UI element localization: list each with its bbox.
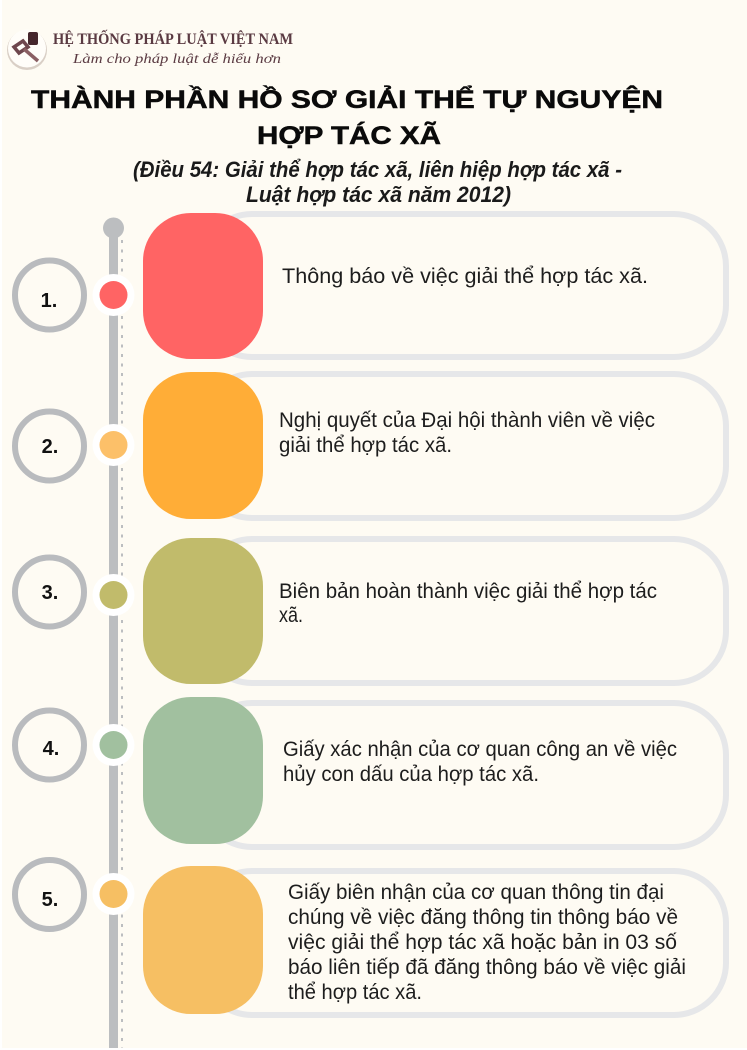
number ring 4 — [15, 710, 84, 780]
text 5 — [288, 881, 686, 1004]
logo — [7, 30, 47, 70]
organisation name: HỆ THỐNG PHÁP LUẬT VIỆT NAM — [53, 28, 293, 48]
text 5: báo liên tiếp đã đăng thông báo về việc giải — [288, 956, 686, 979]
text panel 5 — [200, 871, 726, 1015]
colour block 1 — [143, 213, 263, 359]
text 2: Nghị quyết của Đại hội thành viên về việc — [279, 409, 655, 432]
text 4 — [283, 738, 677, 786]
text 5: thể hợp tác xã. — [288, 981, 422, 1004]
step 4 — [15, 697, 726, 847]
colour block 2 — [143, 372, 263, 519]
timeline dot 3 — [92, 574, 134, 616]
text 5: Giấy biên nhận của cơ quan thông tin đại — [288, 881, 664, 904]
subtitle: (Điều 54: Giải thể hợp tác xã, liên hiệp hợp tác xã - — [133, 157, 622, 182]
step 5 — [15, 860, 726, 1015]
timeline dot 2 — [92, 424, 134, 466]
number ring 4: 4. — [43, 738, 59, 760]
title: HỢP TÁC XÃ — [257, 120, 441, 150]
colour block 4 — [143, 697, 263, 844]
number ring 2 — [15, 412, 84, 480]
number ring 5 — [15, 860, 84, 929]
text 3: Biên bản hoàn thành việc giải thể hợp tác — [279, 580, 657, 603]
step 1 — [15, 213, 726, 359]
number ring 5: 5. — [42, 889, 58, 911]
subtitle: Luật hợp tác xã năm 2012) — [246, 182, 511, 207]
tagline: Làm cho pháp luật dễ hiểu hơn — [72, 52, 281, 67]
number ring 1 — [15, 260, 84, 330]
step 2 — [15, 372, 726, 519]
text 4: hủy con dấu của hợp tác xã. — [283, 763, 539, 786]
text 1: Thông báo về việc giải thể hợp tác xã. — [282, 265, 648, 288]
text panel 2 — [200, 374, 726, 518]
title — [31, 84, 663, 150]
number ring 3 — [15, 558, 84, 626]
colour block 5 — [143, 866, 263, 1014]
text 5: chúng về việc đăng thông tin thông báo về — [288, 906, 678, 929]
timeline — [103, 218, 124, 1048]
text 2: giải thể hợp tác xã. — [279, 434, 452, 457]
subtitle — [133, 157, 622, 207]
text 2 — [279, 409, 655, 457]
number ring 3: 3. — [42, 582, 58, 604]
text 4: Giấy xác nhận của cơ quan công an về việc — [283, 738, 677, 761]
step 3 — [15, 538, 726, 684]
text 3: xã. — [279, 604, 303, 627]
title: THÀNH PHẦN HỒ SƠ GIẢI THỂ TỰ NGUYỆN — [31, 84, 663, 114]
timeline dot 1 — [92, 274, 134, 316]
timeline dot 4 — [92, 724, 134, 766]
text panel 3 — [200, 539, 726, 683]
timeline dot 5 — [92, 873, 134, 915]
text panel 4 — [200, 703, 726, 847]
text 3 — [279, 580, 657, 627]
text panel 1 — [200, 214, 726, 357]
number ring 1: 1. — [41, 290, 57, 312]
colour block 3 — [143, 538, 263, 684]
text 5: việc giải thể hợp tác xã hoặc bản in 03 số — [288, 931, 677, 954]
number ring 2: 2. — [42, 436, 58, 458]
